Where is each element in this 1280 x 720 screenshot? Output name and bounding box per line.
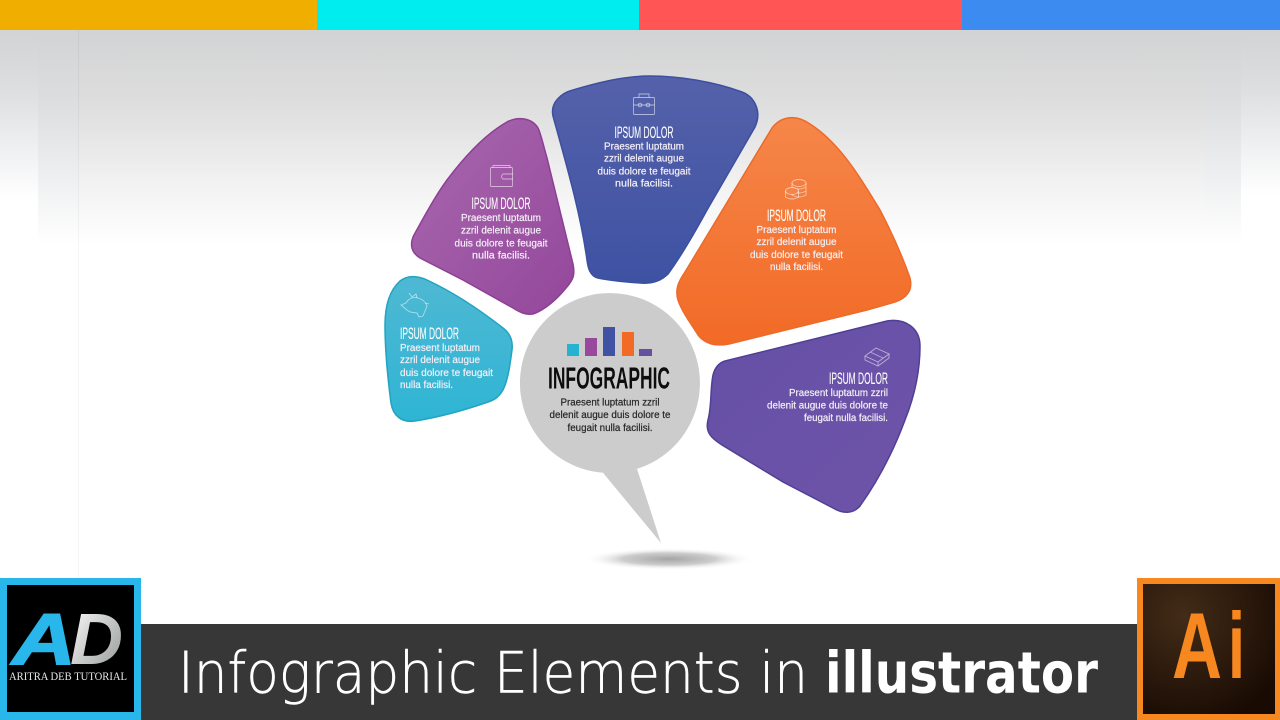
- text block: violet petal: delenit augue duis dolore te: [767, 400, 888, 412]
- logo: Adobe Illustrator: [1137, 578, 1280, 720]
- text block: orange petal: duis dolore te feugait: [750, 250, 843, 261]
- text block: cyan petal: nulla facilisi.: [400, 380, 453, 391]
- logo wordmark: ARITRA DEB TUTORIAL: [9, 669, 127, 683]
- text block: cyan petal: [400, 343, 493, 391]
- text block: blue petal: zzril delenit augue: [604, 154, 684, 164]
- panel: blue petal: IPSUM DOLOR: [614, 123, 674, 142]
- text block: violet petal: Praesent luptatum zzril: [789, 388, 888, 399]
- icon: coins: [786, 180, 806, 199]
- text block: purple petal: duis dolore te feugait: [454, 238, 548, 250]
- title bar: [141, 624, 1137, 720]
- text block: centre description: Praesent luptatum zzril: [560, 398, 660, 408]
- text block: orange petal: [750, 225, 843, 273]
- text block: orange petal: nulla facilisi.: [770, 262, 823, 273]
- logo: Aritra Deb Tutorial: [0, 578, 141, 720]
- panel: violet petal: [707, 320, 920, 512]
- panel: purple petal: [412, 119, 574, 314]
- panel: violet petal: IPSUM DOLOR: [829, 369, 888, 388]
- text block: purple petal: nulla facilisi.: [472, 250, 530, 262]
- text block: blue petal: nulla facilisi.: [615, 178, 673, 190]
- icon: wallet: [490, 166, 513, 186]
- title text: Infographic Elements in: [178, 640, 808, 706]
- panel: cyan petal: IPSUM DOLOR: [400, 324, 459, 343]
- logo letter D: D: [70, 600, 123, 680]
- text block: blue petal: [598, 142, 691, 190]
- text block: centre description: feugait nulla facilisi.: [568, 423, 652, 434]
- icon: briefcase: [634, 94, 654, 114]
- title text: illustrator: [825, 640, 1098, 706]
- panel: purple petal: IPSUM DOLOR: [472, 194, 530, 213]
- text block: cyan petal: zzril delenit augue: [400, 355, 480, 366]
- text block: orange petal: Praesent luptatum: [756, 225, 836, 236]
- heading: INFOGRAPHIC: INFOGRAPHIC: [548, 360, 670, 396]
- Ai lettering: i: [1228, 593, 1245, 698]
- shadow under speech bubble: [584, 548, 754, 570]
- panel: cyan petal: [385, 277, 512, 421]
- icon: eraser: [865, 348, 889, 366]
- icon: piggy bank: [401, 293, 429, 317]
- text block: violet petal: feugait nulla facilisi.: [804, 413, 888, 424]
- logo letter A: A: [10, 600, 76, 680]
- text block: orange petal: zzril delenit augue: [756, 237, 837, 248]
- Ai lettering: A: [1172, 593, 1222, 698]
- text block: cyan petal: duis dolore te feugait: [400, 368, 493, 379]
- bar chart icon: [567, 327, 652, 356]
- text block: purple petal: [454, 213, 548, 262]
- text block: violet petal: [767, 388, 888, 424]
- text block: purple petal: zzril delenit augue: [461, 226, 541, 236]
- text block: centre description: [550, 398, 671, 434]
- text block: purple petal: Praesent luptatum: [461, 213, 541, 224]
- panel: orange petal: IPSUM DOLOR: [767, 206, 826, 225]
- colour strip: [0, 0, 1280, 30]
- text block: centre description: delenit augue duis dolore te: [550, 410, 671, 421]
- text block: blue petal: Praesent luptatum: [604, 142, 684, 152]
- panel: central speech bubble: [520, 293, 700, 543]
- text block: cyan petal: Praesent luptatum: [400, 343, 480, 354]
- text block: blue petal: duis dolore te feugait: [598, 166, 691, 178]
- panel: orange petal: [677, 118, 911, 345]
- panel: blue petal: [553, 76, 758, 283]
